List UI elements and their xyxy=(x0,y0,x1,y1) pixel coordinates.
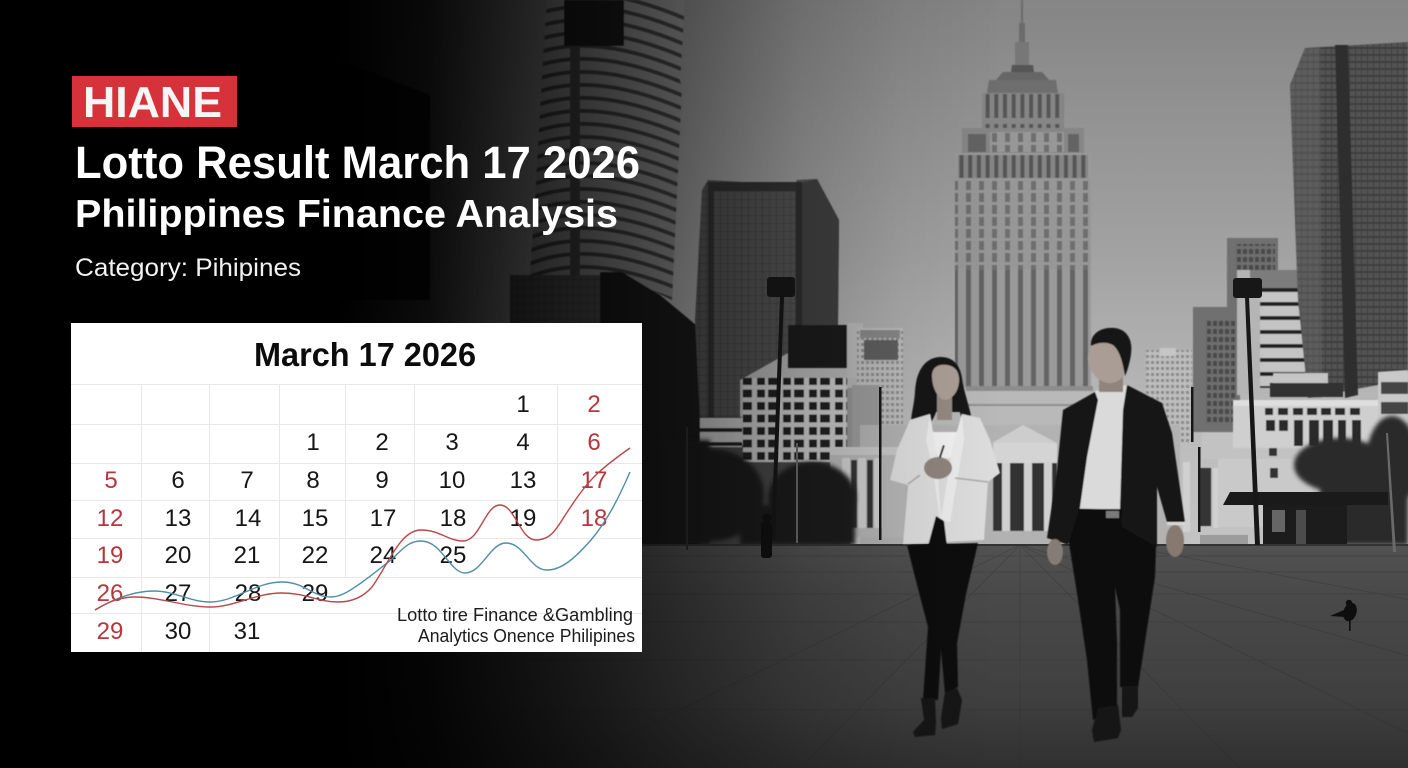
calendar numbers: 19 xyxy=(510,505,536,532)
calendar numbers: 3 xyxy=(445,429,459,456)
trees xyxy=(660,416,1408,545)
calendar numbers: 24 xyxy=(370,542,396,569)
red trend line xyxy=(95,448,630,610)
calendar numbers: 8 xyxy=(306,467,320,494)
blazer opening xyxy=(928,516,947,546)
calendar numbers: 7 xyxy=(240,467,254,494)
calendar grid xyxy=(71,384,642,652)
calendar numbers: 19 xyxy=(97,542,123,569)
brand tag: HIANE xyxy=(83,78,222,127)
billboard and white side xyxy=(847,323,863,378)
jacket right xyxy=(1120,385,1185,547)
sky xyxy=(0,0,1408,560)
face xyxy=(932,365,959,400)
calendar numbers: 17 xyxy=(581,467,607,494)
calendar panel xyxy=(71,323,642,652)
neoclassical halls xyxy=(830,370,1408,545)
calendar numbers: 25 xyxy=(440,542,466,569)
calendar numbers: 17 xyxy=(370,505,396,532)
pavilion xyxy=(1223,492,1388,545)
calendar numbers: 1 xyxy=(306,429,320,456)
calendar numbers: 6 xyxy=(171,467,185,494)
pale tower A xyxy=(1146,350,1192,445)
calendar numbers: 20 xyxy=(165,542,191,569)
calendar numbers: 1 xyxy=(516,391,530,418)
calendar numbers: 29 xyxy=(97,618,123,645)
tower podium xyxy=(966,386,1093,426)
white office block xyxy=(743,378,847,462)
calendar numbers: 15 xyxy=(302,505,328,532)
calendar numbers: 14 xyxy=(235,505,261,532)
calendar numbers: 9 xyxy=(375,467,389,494)
calendar caption: Analytics Onence Philipines xyxy=(418,626,635,646)
calendar numbers: 2 xyxy=(375,429,389,456)
columns xyxy=(842,458,1219,532)
dark corner building xyxy=(600,272,702,470)
hair back xyxy=(911,357,972,432)
right skyline buildings xyxy=(955,0,1408,445)
calendar caption xyxy=(397,605,635,646)
distant pedestrian xyxy=(761,514,772,558)
belt xyxy=(1078,509,1122,518)
category line: Category: Pihipines xyxy=(75,254,301,282)
central tower crown xyxy=(996,72,1049,80)
calendar numbers: 30 xyxy=(165,618,191,645)
calendar numbers: 21 xyxy=(234,542,260,569)
dark bays xyxy=(851,460,1211,528)
calendar numbers: 6 xyxy=(587,429,601,456)
calendar numbers: 22 xyxy=(302,542,328,569)
calendar numbers: 29 xyxy=(302,580,328,607)
dark glass building xyxy=(695,179,839,420)
pavilion roof xyxy=(1223,492,1388,505)
dark ground-level backdrop xyxy=(480,440,705,546)
woman xyxy=(890,357,1000,737)
small striped annex xyxy=(700,417,742,447)
calendar numbers: 13 xyxy=(510,467,536,494)
far right striped block xyxy=(1378,370,1408,432)
sleeve creases xyxy=(908,475,988,484)
gray tower B xyxy=(1193,307,1240,432)
panel background xyxy=(71,323,642,652)
central tower spire xyxy=(1021,0,1023,25)
shirt xyxy=(1080,385,1127,510)
parked cars xyxy=(1200,535,1248,545)
neck xyxy=(937,394,952,420)
calendar numbers xyxy=(97,391,607,645)
blue trend line xyxy=(95,472,630,610)
background city photo scene xyxy=(402,0,1408,768)
calendar numbers: 10 xyxy=(439,467,465,494)
calendar numbers: 28 xyxy=(235,580,261,607)
calendar numbers: 13 xyxy=(165,505,191,532)
central hall wall xyxy=(860,425,1180,545)
plaza pavement xyxy=(0,545,1408,768)
calendar caption: Lotto tire Finance &Gambling xyxy=(397,605,633,625)
central portico interior xyxy=(993,463,1057,531)
calendar numbers: 31 xyxy=(234,618,260,645)
calendar numbers: 27 xyxy=(165,580,191,607)
pigeon xyxy=(1330,600,1359,631)
gray tower C xyxy=(1227,238,1278,308)
hair xyxy=(1091,328,1131,376)
low grid block behind calendar xyxy=(510,275,622,335)
hands xyxy=(924,457,952,479)
pale tower behind billboard xyxy=(857,328,903,428)
jacket left xyxy=(1047,392,1098,545)
trousers xyxy=(907,543,978,700)
left skyline buildings xyxy=(418,0,904,544)
shoes xyxy=(1092,705,1121,742)
head xyxy=(1088,338,1129,383)
calendar numbers: 2 xyxy=(587,391,601,418)
left hall xyxy=(830,447,905,537)
subtitle: Philippines Finance Analysis xyxy=(75,193,618,236)
pen xyxy=(939,445,945,458)
main title: Lotto Result March 17 2026 xyxy=(75,137,640,188)
man xyxy=(1047,328,1185,742)
calendar numbers: 26 xyxy=(97,580,123,607)
curved glass tower xyxy=(530,0,684,300)
lamp posts xyxy=(767,277,1262,545)
calendar numbers: 5 xyxy=(104,467,118,494)
striped tower D xyxy=(1237,270,1310,395)
right hall lower xyxy=(1218,457,1313,527)
big dark right tower xyxy=(1290,42,1408,398)
calendar numbers: 18 xyxy=(581,505,607,532)
heels xyxy=(913,698,936,737)
central portico pediment xyxy=(992,425,1057,443)
pavilion body xyxy=(1263,505,1347,545)
right hall upper xyxy=(1233,400,1380,448)
central tower shaft xyxy=(955,153,1091,388)
calendar numbers: 18 xyxy=(440,505,466,532)
blouse and lapel xyxy=(930,432,957,458)
calendar heading: March 17 2026 xyxy=(254,336,476,373)
calendar numbers: 12 xyxy=(97,505,123,532)
hands xyxy=(1047,539,1063,565)
trousers xyxy=(1069,510,1157,720)
calendar numbers: 4 xyxy=(516,429,530,456)
far dark block xyxy=(340,60,430,300)
blazer xyxy=(890,414,1000,544)
neck xyxy=(1099,372,1123,392)
